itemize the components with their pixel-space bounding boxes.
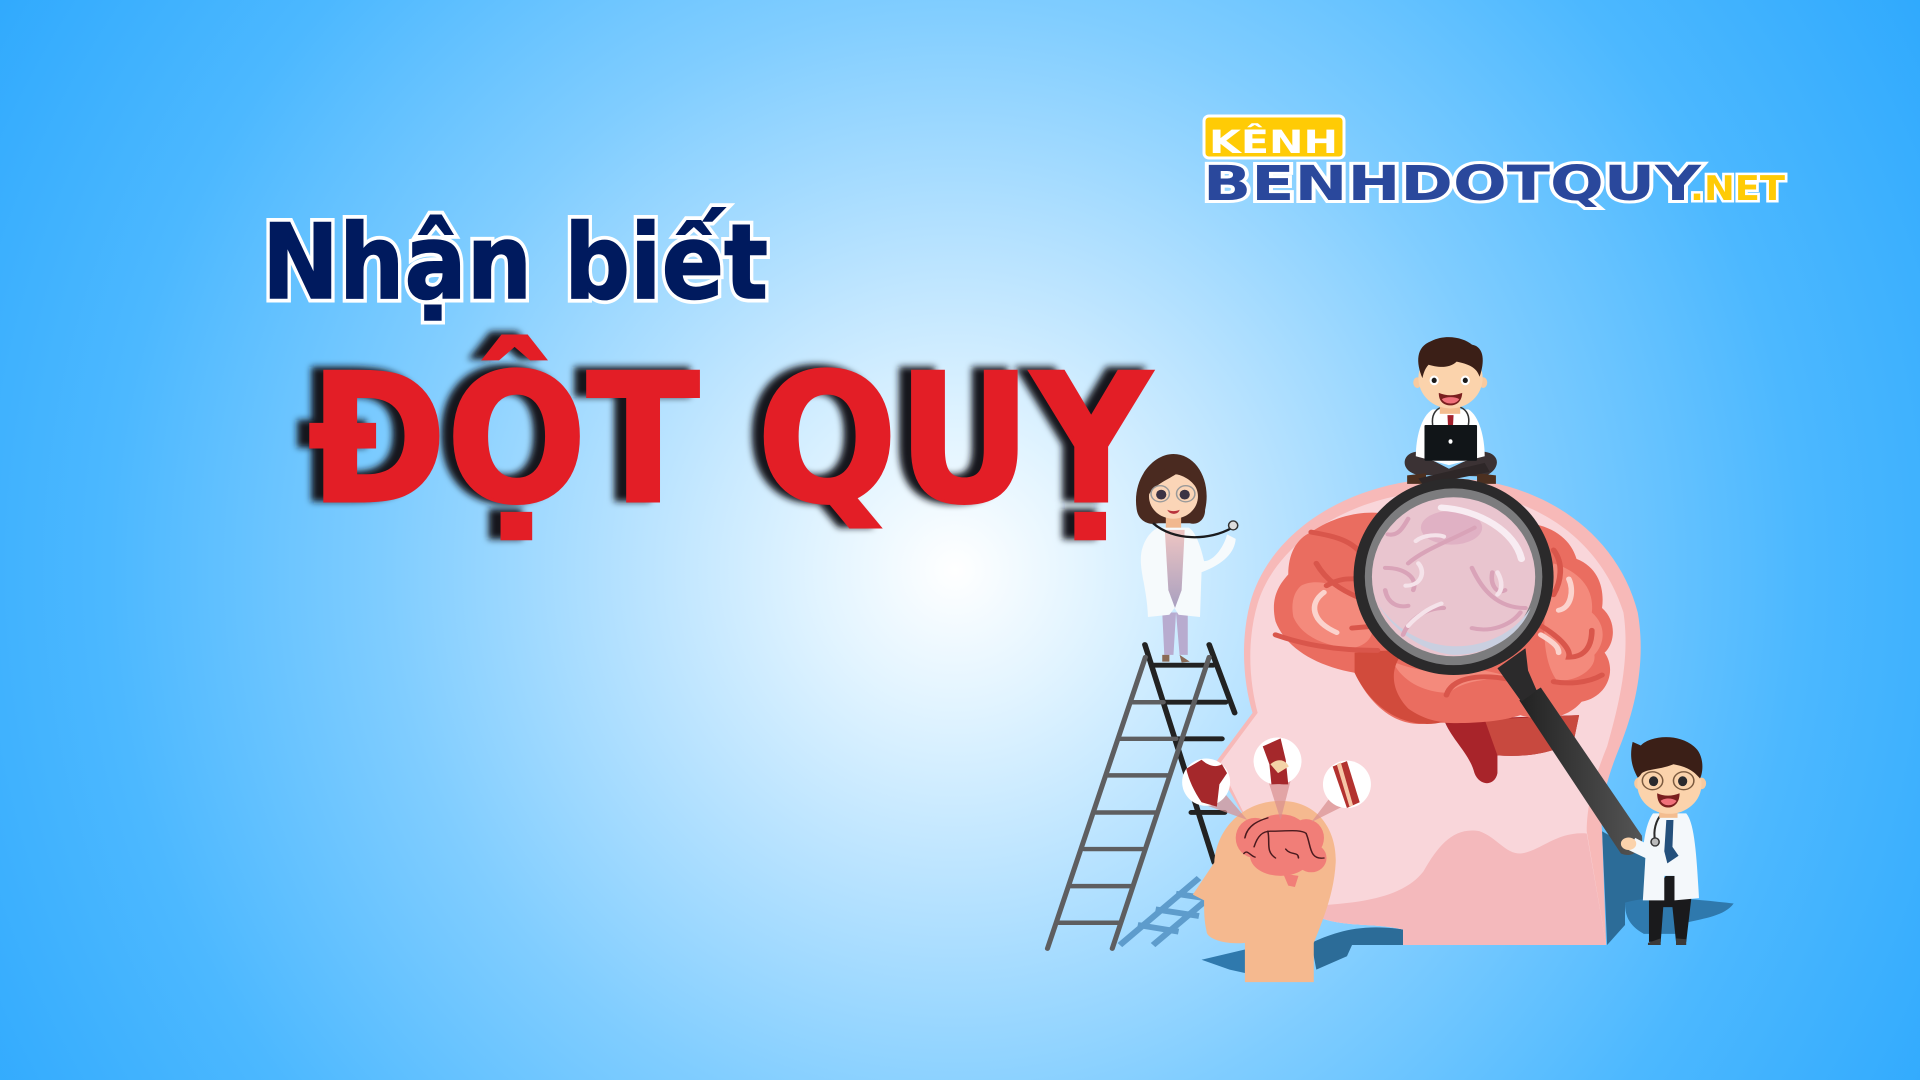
glasses xyxy=(1151,486,1195,502)
doctor: right holding magnifier xyxy=(1621,737,1706,945)
hair xyxy=(1418,337,1483,378)
stethoscope xyxy=(1654,813,1662,840)
callout cones xyxy=(1191,780,1347,822)
small head with brain xyxy=(1182,737,1371,982)
ladder xyxy=(1047,645,1235,949)
mouth xyxy=(1657,793,1680,808)
hair back xyxy=(1136,454,1207,524)
doctor: top with laptop xyxy=(1405,337,1497,485)
legs xyxy=(1405,452,1497,476)
small brain xyxy=(1236,814,1327,887)
large brain xyxy=(1274,513,1613,783)
glasses xyxy=(1642,772,1694,790)
callout: clotted vessel xyxy=(1254,737,1302,785)
lens bruise xyxy=(1421,511,1482,545)
hair xyxy=(1631,737,1702,779)
mouth xyxy=(1439,393,1462,405)
ground shadows xyxy=(1202,831,1734,974)
tie xyxy=(1664,820,1679,863)
ears xyxy=(1413,377,1421,388)
torso xyxy=(1416,409,1485,465)
coat xyxy=(1629,813,1699,900)
mouth xyxy=(1167,510,1180,514)
logo suffix: .NET: .NET xyxy=(1690,169,1786,209)
brain highlights xyxy=(1315,579,1571,653)
title line 2: ĐỘT QUỴ xyxy=(297,333,1153,543)
magnifying glass xyxy=(1354,479,1642,855)
front rails and rungs xyxy=(1047,657,1209,949)
title shadow: ĐỘT QUỴ xyxy=(297,333,1142,541)
logo badge: KÊNH xyxy=(1204,116,1344,161)
logo wordmark: BENHDOTQUY: BENHDOTQUY xyxy=(1203,156,1703,212)
logo wordmark: BENHDOTQUY: BENHDOTQUY xyxy=(1203,156,1703,212)
lens vessels xyxy=(1385,519,1526,635)
ears and neck xyxy=(1634,778,1643,789)
big head silhouette xyxy=(1214,478,1641,945)
handle xyxy=(1519,687,1642,855)
brain stem and cerebellum xyxy=(1444,715,1579,783)
logo badge: KÊNH: KÊNH xyxy=(1209,123,1338,161)
logo: Kênh Bệnh Đột Quỵ xyxy=(1203,116,1786,212)
eyes xyxy=(1430,375,1439,385)
logo suffix: .NET: .NET xyxy=(1690,169,1786,209)
lens xyxy=(1372,497,1535,656)
neck and face xyxy=(1440,400,1460,414)
face xyxy=(1637,755,1702,814)
coat xyxy=(1141,528,1236,617)
back rails and rungs xyxy=(1145,645,1235,862)
brain dark lobe xyxy=(1355,651,1444,724)
title line 1: Nhận biết: Nhận biết xyxy=(262,203,768,323)
tan head xyxy=(1193,801,1336,982)
hand xyxy=(1621,837,1636,850)
collar xyxy=(1497,648,1537,702)
trousers xyxy=(1649,876,1691,942)
illustration: doctors examining the brain xyxy=(1047,337,1734,982)
stethoscope xyxy=(1153,523,1232,537)
ladder shadow xyxy=(1120,878,1224,945)
legs xyxy=(1162,612,1188,655)
neck and face xyxy=(1166,514,1181,528)
callout: burst vessel xyxy=(1182,758,1230,807)
lens glare xyxy=(1441,508,1521,559)
rim xyxy=(1354,479,1554,675)
brain light lobes xyxy=(1292,563,1603,693)
dress xyxy=(1165,530,1185,608)
laptop xyxy=(1424,425,1477,461)
brain folds xyxy=(1276,532,1602,695)
doctor: woman with stethoscope xyxy=(1136,454,1238,662)
callout: narrowed vessel xyxy=(1323,761,1371,808)
title line 1: Nhận biết: Nhận biết xyxy=(262,203,768,323)
brain mass xyxy=(1274,513,1613,724)
title face: ĐỘT QUỴ xyxy=(308,335,1153,543)
head lower shade xyxy=(1321,831,1606,945)
small brain folds xyxy=(1244,818,1324,858)
fringe xyxy=(1148,469,1200,496)
